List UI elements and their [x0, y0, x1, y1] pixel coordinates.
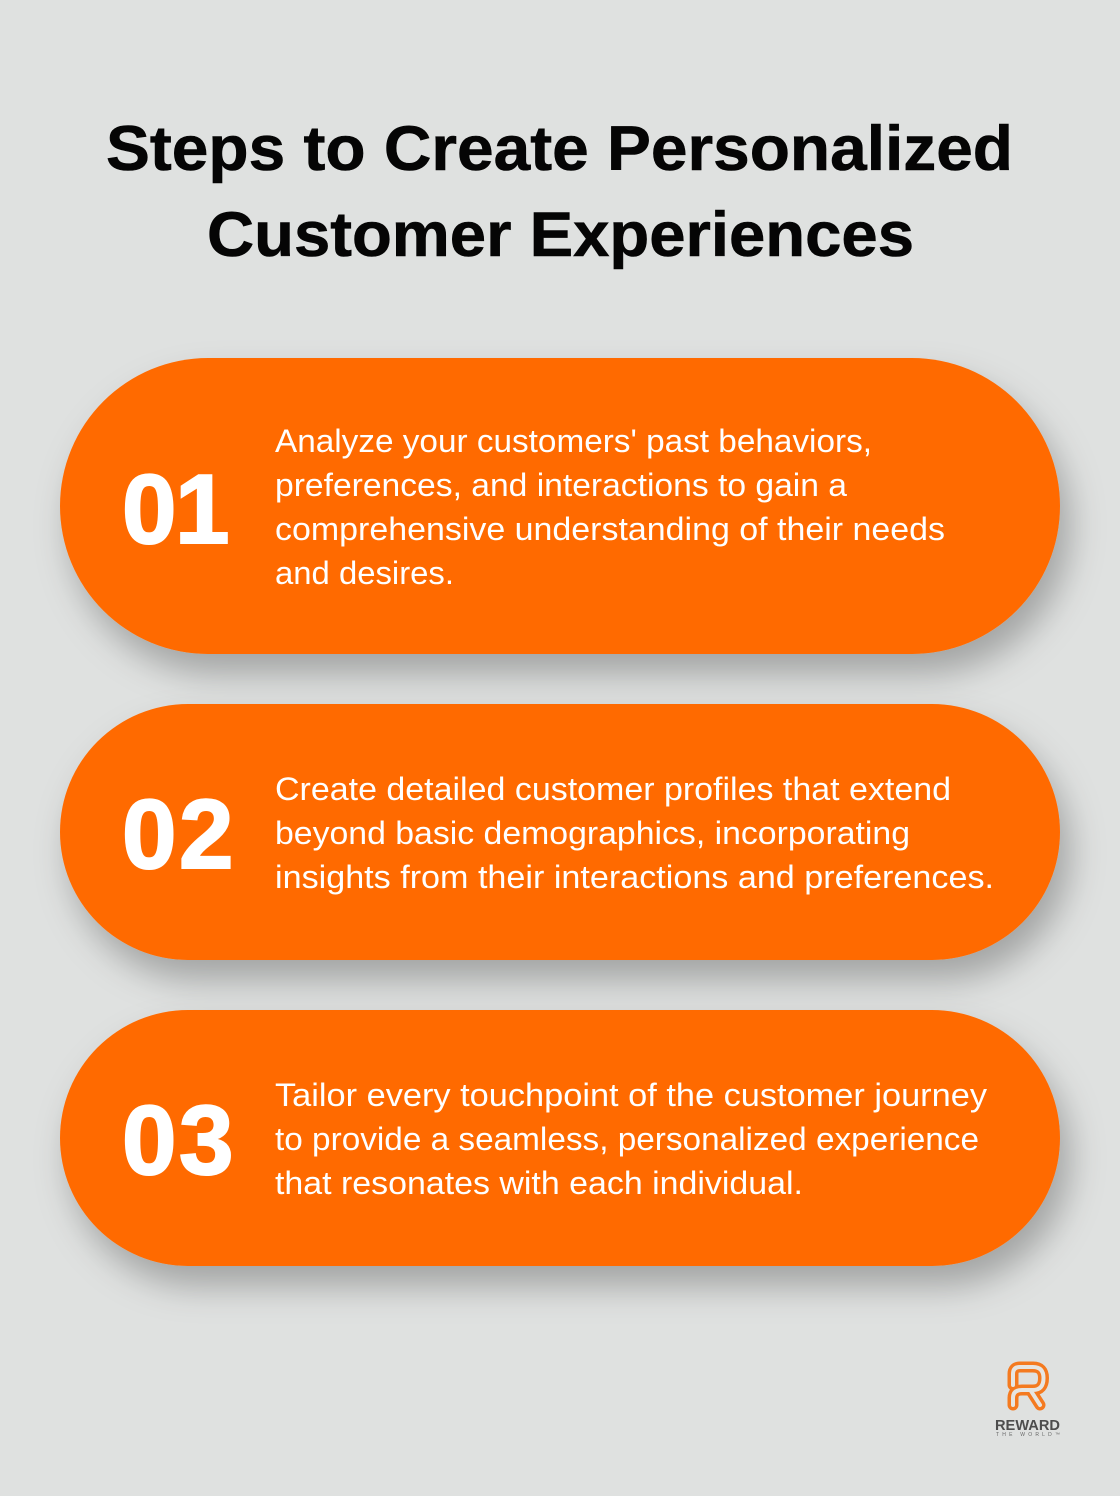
- text: step 01 description: and desires.: [275, 555, 454, 591]
- panel: step 01: [60, 358, 1060, 654]
- text: step 02 description: insights from their interactions and preferences.: [275, 859, 994, 895]
- text: step 02 description: beyond basic demographics, incorporating: [275, 815, 910, 851]
- text: step 02 description: Create detailed customer profiles that extend: [275, 771, 951, 807]
- icon: R mark: [1013, 1367, 1044, 1405]
- wordmark: REWARD: [995, 1418, 1060, 1434]
- text: step 01 description: preferences, and interactions to gain a: [275, 467, 848, 503]
- pill background 03: [60, 1010, 1060, 1266]
- number 01: 01: [122, 454, 230, 564]
- text: step 03 description: to provide a seamless, personalized experience: [275, 1121, 979, 1157]
- number 03: 03: [122, 1085, 234, 1195]
- title: Customer Experiences: [207, 200, 914, 270]
- text: step 03 description: that resonates with each individual.: [275, 1165, 803, 1201]
- logo: Reward the World: [995, 1367, 1060, 1438]
- text: step 03 description: Tailor every touchpoint of the customer journey: [275, 1077, 988, 1113]
- title: [106, 114, 1013, 270]
- number 02: 02: [122, 779, 234, 889]
- panel: step 03: [60, 1010, 1060, 1266]
- text: step 01 description: comprehensive understanding of their needs: [275, 511, 945, 547]
- title: Steps to Create Personalized: [106, 114, 1013, 184]
- panel: step 02: [60, 704, 1060, 960]
- text: step 01 description: Analyze your customers' past behaviors,: [275, 423, 872, 459]
- text: step 03 description: [275, 1077, 988, 1201]
- pill background 01: [60, 358, 1060, 654]
- pill background 02: [60, 704, 1060, 960]
- text: step 02 description: [275, 771, 994, 895]
- tagline: THE WORLD™: [996, 1432, 1060, 1438]
- text: step 01 description: [275, 423, 945, 591]
